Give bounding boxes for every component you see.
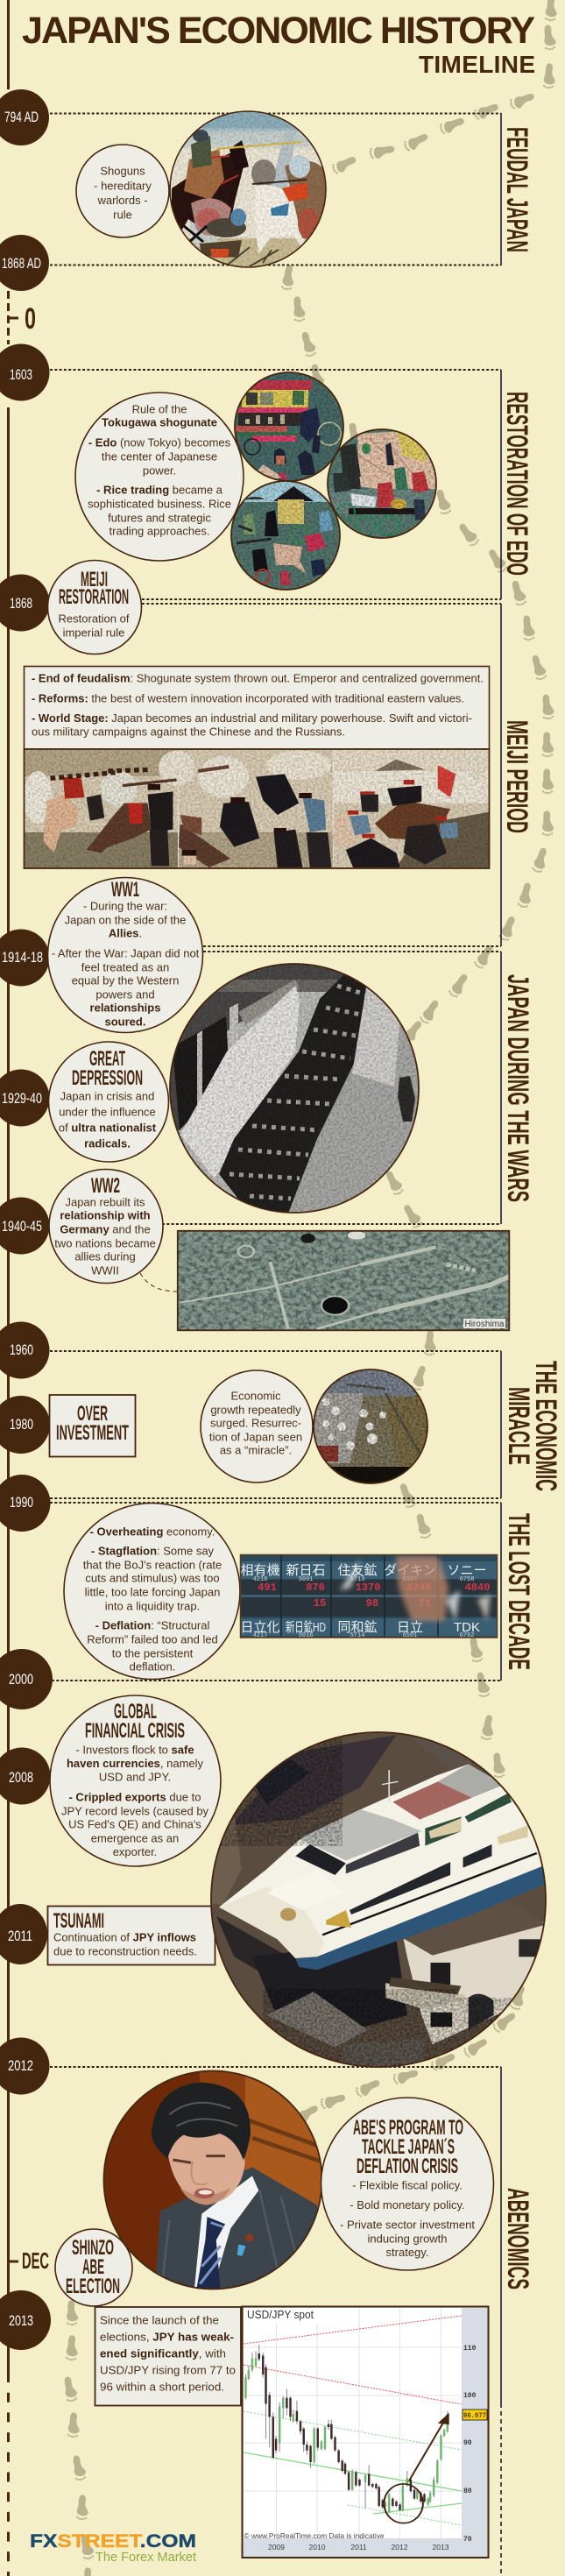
picture: meiji battle triptych (24, 749, 490, 869)
callout: meiji restoration: Restoration of (59, 612, 130, 626)
picture: samurai battle print (170, 111, 326, 268)
chart: usd/jpy candlesticks: 90 (463, 2439, 472, 2447)
logo: fxstreet (30, 2531, 197, 2565)
panel: meiji period (0, 561, 533, 869)
date 794 AD (0, 89, 49, 145)
year zero marker (7, 302, 36, 336)
marker: dec: DEC (22, 2247, 49, 2274)
callout: global financial crisis: USD and JPY. (99, 1770, 171, 1784)
date 1940-45: 1940-45 (2, 1218, 42, 1235)
callout: shinzo abe election: ABE (82, 2255, 104, 2279)
picture: stock ticker board: TDK (454, 1620, 480, 1635)
callout: global financial crisis: haven currencies, namely (67, 1757, 204, 1770)
text box: meiji reforms: - World Stage: Japan becomes an industrial and military powerhouse. Swift and victori- (32, 711, 472, 725)
year zero marker: 0 (25, 302, 36, 336)
callout: tokugawa: - Edo (now Tokyo) becomes (88, 436, 231, 449)
callout: global financial crisis: FINANCIAL CRISIS (85, 1719, 185, 1743)
picture: stock ticker board: 15 (314, 1597, 326, 1610)
callout: economic growth: as a “miracle”. (220, 1444, 292, 1456)
callout: overheating: - Overheating economy. (90, 1525, 215, 1539)
callout: global financial crisis: GLOBAL (114, 1700, 157, 1723)
callout: economic growth: growth repeatedly (210, 1404, 301, 1416)
date 1914-18: 1914-18 (2, 949, 43, 966)
picture: hiroshima aerial (177, 1230, 510, 1331)
date 1868 AD (0, 235, 49, 291)
callout: great depression: radicals. (84, 1137, 131, 1150)
chart: usd/jpy candlesticks (242, 2306, 489, 2558)
picture: stock ticker board: ダイキン (384, 1563, 436, 1578)
picture: stock ticker board (240, 1554, 498, 1639)
callout: tokugawa: sophisticated business. Rice (88, 498, 231, 510)
picture: stock ticker board: 6762 (460, 1632, 474, 1639)
callout: ww2: WWII (91, 1263, 119, 1277)
callout: meiji restoration: imperial rule (63, 626, 124, 640)
picture: stock ticker board: 491 (258, 1582, 277, 1594)
callout: tsunami: TSUNAMI (53, 1909, 104, 1933)
chart: usd/jpy candlesticks: 2012 (392, 2543, 408, 2551)
date 2013: 2013 (9, 2312, 33, 2329)
callout: meiji restoration: RESTORATION (59, 585, 129, 609)
picture: stock ticker board: 5016 (299, 1632, 313, 1639)
chart: usd/jpy candlesticks: 100 (463, 2392, 477, 2400)
picture: stock ticker board: 98 (366, 1597, 378, 1610)
picture: ship on building after tsunami (211, 1732, 546, 2068)
panel: the economic miracle (0, 1321, 562, 1491)
chart: usd/jpy candlesticks: © www.ProRealTime.com Data is indicative (244, 2531, 385, 2540)
chart: usd/jpy candlesticks: 2013 (433, 2543, 449, 2551)
date 2012: 2012 (8, 2057, 33, 2074)
callout: over investment (49, 1395, 135, 1456)
callout: ww1: Allies. (109, 927, 142, 939)
timeline axis (7, 0, 10, 2576)
callout: ww1: feel treated as an (81, 960, 169, 974)
date 1980: 1980 (10, 1416, 33, 1433)
date 1603: 1603 (10, 366, 32, 383)
callout: shinzo abe election: ELECTION (66, 2275, 120, 2298)
callout: abe program: inducing growth (367, 2233, 448, 2245)
callout: shinzo abe election: SHINZO (72, 2236, 114, 2260)
callout: tokugawa (75, 393, 244, 561)
picture: stock ticker board: 新日石 (286, 1563, 326, 1578)
callout: economic growth (201, 1370, 313, 1483)
era label: restoration of edo: RESTORATION OF EDO (500, 392, 533, 576)
date 2000: 2000 (9, 1671, 33, 1688)
text box: meiji reforms: - End of feudalism: Shogunate system thrown out. Emperor and centralized government. (32, 671, 484, 685)
date 1603 (0, 343, 49, 401)
text box: jpy weakened: elections, JPY has weak- (100, 2331, 234, 2343)
callout: tokugawa: futures and strategic (108, 512, 211, 524)
chart: usd/jpy candlesticks: 96.077 (463, 2412, 486, 2420)
callout: abe program: - Flexible fiscal policy. (352, 2178, 463, 2192)
callout: abe program: DEFLATION CRISIS (357, 2155, 458, 2178)
callout: shoguns: Shoguns (100, 165, 145, 177)
date 1940-45 (0, 1197, 49, 1255)
picture: stock ticker board: 3245 (406, 1582, 431, 1594)
callout: overheating: into a liquidity trap. (105, 1600, 200, 1612)
picture: stock ticker board: 日立化 (240, 1620, 280, 1635)
callout: ww2: two nations became (54, 1237, 156, 1249)
callout: ww1: Japan on the side of the (65, 913, 186, 927)
callout: great depression: under the influence (59, 1106, 156, 1118)
date 2008: 2008 (9, 1769, 33, 1786)
callout: ww1: - During the war: (83, 899, 167, 913)
callout: over investment: INVESTMENT (56, 1421, 129, 1445)
era label: japan during the wars: JAPAN DURING THE WARS (501, 974, 534, 1202)
callout: ww1: - After the War: Japan did not (52, 946, 200, 960)
callout: overheating: Reform” failed too and led (87, 1633, 218, 1645)
callout: overheating: deflation. (130, 1660, 175, 1674)
callout: overheating: - Deflation: “Structural (95, 1619, 209, 1631)
picture: stock ticker board: 6758 (460, 1576, 474, 1583)
era brackets (50, 113, 501, 2576)
callout: great depression: of ultra nationalist (59, 1122, 157, 1134)
date 1929-40: 1929-40 (2, 1090, 42, 1107)
era label: the economic miracle (502, 1361, 562, 1491)
callout: tokugawa: Rule of the (132, 403, 187, 415)
picture: stock ticker board: 同和鉱 (337, 1620, 378, 1635)
dashed connector (140, 1273, 177, 1292)
date 1929-40 (0, 1069, 49, 1127)
callout: overheating: to the persistent (112, 1647, 194, 1660)
picture: edo print carriage (235, 372, 343, 482)
date 1960 (0, 1321, 49, 1379)
callout: ww2: Germany and the (60, 1223, 151, 1235)
text box: meiji reforms: ous military campaigns against the Chinese and the Russians. (32, 725, 345, 738)
callout: ww1: relationships (90, 1001, 160, 1015)
picture: stock ticker board: 6501 (403, 1632, 417, 1639)
callout: ww1: equal by the Western (72, 974, 179, 987)
date 2012 (0, 2038, 49, 2094)
picture: stock ticker board: 相有機 (240, 1563, 280, 1578)
panel: crisis and tsunami (0, 1695, 546, 2068)
picture: edo print street (231, 481, 340, 591)
callout: ww1 (47, 878, 203, 1032)
panel: abenomics (0, 2038, 534, 2558)
picture: stock ticker board: 5713 (350, 1576, 364, 1583)
callout: shoguns (76, 145, 169, 237)
chart: usd/jpy candlesticks: 110 (463, 2345, 477, 2353)
panel: restoration of edo (0, 343, 533, 591)
picture: stock ticker board: 日立 (397, 1620, 423, 1635)
era label: abenomics: ABENOMICS (501, 2188, 534, 2289)
era label: meiji period: MEIJI PERIOD (500, 720, 533, 833)
callout: ww1: WW1 (111, 878, 139, 902)
callout: ww2: allies during (74, 1249, 136, 1263)
callout: global financial crisis: - Investors flock to safe (75, 1744, 194, 1756)
date 1914-18 (0, 929, 49, 987)
callout: meiji restoration (47, 561, 142, 654)
callout: tokugawa: power. (143, 464, 176, 477)
callout: abe program: - Private sector investment (340, 2219, 475, 2231)
title (22, 10, 535, 78)
date 2008 (0, 1747, 51, 1805)
date 2013 (0, 2290, 51, 2350)
callout: abe program: ABE'S PROGRAM TO (353, 2116, 463, 2140)
date 2000 (0, 1649, 53, 1709)
picture: stock ticker board: 6367 (403, 1576, 417, 1583)
callout: overheating: cuts and stimulus) was too (85, 1572, 220, 1584)
logo: fxstreet: The Forex Market (95, 2550, 197, 2565)
callout: overheating: that the BoJ's reaction (rate (83, 1558, 222, 1572)
logo: fxstreet: FXSTREET .COM (30, 2531, 196, 2551)
text box: jpy weakened (95, 2307, 241, 2406)
text box: meiji reforms (25, 666, 489, 749)
chart: usd/jpy candlesticks: 2011 (350, 2543, 367, 2551)
callout: tsunami: due to reconstruction needs. (53, 1945, 197, 1957)
callout: shoguns: rule (113, 209, 132, 221)
callout: overheating (64, 1504, 240, 1679)
picture: stock ticker board: 5001 (299, 1576, 313, 1583)
era label: the lost decade: THE LOST DECADE (502, 1513, 535, 1670)
date 794 AD: 794 AD (4, 109, 39, 125)
panel: japan during the wars (0, 878, 534, 1331)
callout: abe program: TACKLE JAPAN´S (362, 2135, 455, 2159)
date 1868 (0, 575, 49, 631)
callout: tokugawa: Tokugawa shogunate (102, 415, 217, 429)
picture: stock ticker board: 1370 (356, 1582, 380, 1594)
callout: tsunami (47, 1907, 215, 1964)
text box: meiji reforms: - Reforms: the best of western innovation incorporated with traditional eastern values. (32, 692, 464, 704)
picture: shinzo abe (103, 2070, 322, 2289)
callout: meiji restoration: MEIJI (81, 568, 108, 591)
text box: jpy weakened: USD/JPY rising from 77 to (100, 2364, 236, 2376)
picture: edo print river boat (328, 429, 436, 539)
callout: tsunami: Continuation of JPY inflows (53, 1931, 196, 1943)
picture: stock ticker board: 876 (306, 1582, 325, 1594)
date 1960: 1960 (10, 1341, 33, 1358)
callout: shoguns: warlords - (96, 194, 148, 207)
callout: ww2: relationship with (60, 1209, 151, 1221)
title: TIMELINE (419, 51, 535, 78)
picture: stock ticker board: 新日鉱HD (286, 1620, 326, 1635)
callout: great depression: Japan in crisis and (60, 1090, 154, 1102)
marker: dec (8, 2247, 49, 2274)
era label: the economic miracle: THE ECONOMIC (529, 1361, 562, 1491)
date 1868 AD: 1868 AD (2, 255, 41, 272)
image caption: hiroshima: Hiroshima (464, 1320, 505, 1329)
panel: feudal japan (0, 89, 533, 291)
chart: usd/jpy candlesticks: 2009 (268, 2543, 285, 2551)
picture: stock ticker board: 住友鉱 (337, 1563, 378, 1578)
date 1980 (0, 1396, 50, 1454)
callout: ww2 (49, 1169, 163, 1283)
callout: global financial crisis: emergence as an (91, 1831, 179, 1845)
callout: ww1: soured. (105, 1015, 145, 1029)
picture: stock ticker board: 71 (419, 1597, 431, 1610)
callout: great depression: DEPRESSION (72, 1066, 143, 1090)
callout: economic growth: Economic (230, 1390, 281, 1402)
text box: jpy weakened: ened significantly, with (100, 2346, 226, 2360)
chart: usd/jpy candlesticks: 2010 (309, 2543, 326, 2551)
callout: overheating: - Stagflation: Some say (91, 1544, 215, 1558)
picture: refinery aerial (314, 1369, 427, 1486)
picture: stock ticker board: 4840 (465, 1582, 490, 1594)
callout: tokugawa: trading approaches. (109, 524, 209, 538)
callout: ww2: Japan rebuilt its (65, 1195, 145, 1209)
picture: stock ticker board: 4217 (253, 1632, 267, 1639)
chart: usd/jpy candlesticks: USD/JPY spot (247, 2309, 314, 2321)
callout: tokugawa: - Rice trading became a (96, 484, 223, 496)
callout: global financial crisis (50, 1695, 221, 1866)
callout: economic growth: surged. Resurrec- (210, 1416, 301, 1430)
callout: global financial crisis: exporter. (113, 1845, 157, 1858)
callout: global financial crisis: - Crippled exports due to (68, 1791, 201, 1803)
date 2011: 2011 (8, 1928, 32, 1944)
date 1990 (0, 1475, 51, 1532)
era label: feudal japan: FEUDAL JAPAN (500, 127, 533, 252)
callout: abe program (321, 2098, 494, 2270)
callout: abe program: strategy. (386, 2246, 428, 2259)
title: JAPAN'S ECONOMIC HISTORY (22, 10, 535, 52)
callout: shoguns: - hereditary (94, 179, 152, 193)
date 2011 (0, 1904, 47, 1964)
picture: stock ticker board: ソニー (447, 1563, 487, 1578)
picture: stock ticker board: 4216 (253, 1576, 267, 1583)
callout: global financial crisis: US Fed's QE) and China's (68, 1817, 201, 1831)
callout: abe program: - Bold monetary policy. (350, 2198, 465, 2212)
callout: over investment: OVER (77, 1402, 108, 1426)
callout: economic growth: tion of Japan seen (209, 1430, 302, 1444)
callout: tokugawa: the center of Japanese (102, 450, 217, 463)
callout: global financial crisis: JPY record levels (caused by (61, 1805, 209, 1817)
chart: usd/jpy candlesticks: 80 (463, 2488, 472, 2495)
callout: great depression: GREAT (89, 1047, 125, 1071)
callout: shinzo abe election (55, 2229, 132, 2306)
callout: great depression (49, 1042, 168, 1162)
callout: ww2: WW2 (91, 1174, 120, 1198)
era label: the economic miracle: MIRACLE (502, 1387, 535, 1465)
panel: the lost decade (0, 1475, 535, 1709)
chart: usd/jpy candlesticks: 70 (463, 2536, 472, 2544)
callout: overheating: little, too late forcing Japan (85, 1586, 220, 1598)
picture: stock ticker board: 5714 (350, 1632, 364, 1639)
text box: jpy weakened: 96 within a short period. (100, 2380, 224, 2394)
date 1868: 1868 (10, 595, 32, 612)
callout: ww1: powers and (95, 988, 155, 1001)
date 1990: 1990 (10, 1494, 33, 1511)
picture: depression queue (170, 964, 419, 1214)
text box: jpy weakened: Since the launch of the (100, 2313, 219, 2327)
